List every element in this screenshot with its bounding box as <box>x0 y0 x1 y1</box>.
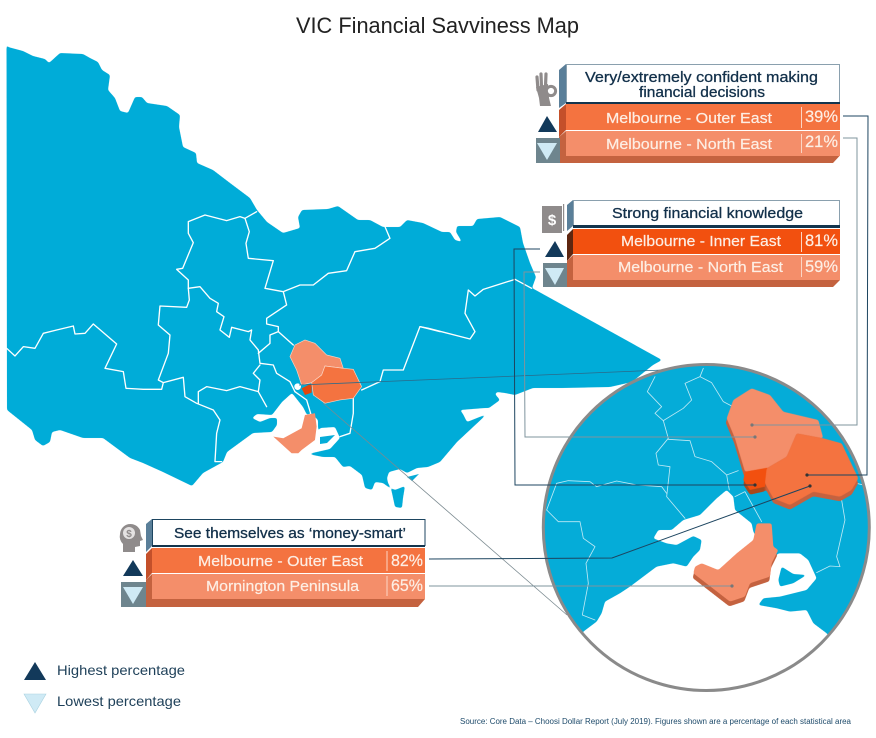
row labels: 81% <box>805 231 838 250</box>
island <box>320 435 335 444</box>
Melbourne dot <box>294 383 301 390</box>
region: Melbourne North East <box>290 340 343 385</box>
header text: financial decisions <box>639 84 765 101</box>
header bevel <box>146 519 152 552</box>
region boundaries <box>7 212 440 462</box>
legend: highest: Highest percentage <box>57 662 185 678</box>
header bevel <box>567 200 573 231</box>
region: Mornington Peninsula <box>273 413 317 453</box>
header text: Strong financial knowledge <box>612 205 803 222</box>
row dividers <box>800 107 802 153</box>
icon: dollar note <box>542 204 564 233</box>
highlighted regions on map <box>273 340 362 453</box>
borders in circle <box>547 368 863 620</box>
icon: dollar note: $ <box>548 212 557 229</box>
header box <box>574 200 840 226</box>
row: highest <box>152 548 425 573</box>
zoom region: Melbourne Outer East <box>765 433 858 505</box>
panel: money-smart <box>120 519 425 607</box>
row labels: 82% <box>391 551 423 570</box>
zoom region: Melbourne Inner East <box>743 468 767 490</box>
icon: head with dollar: $ <box>126 529 132 540</box>
icon: up triangle <box>545 241 564 257</box>
row labels: Melbourne - Inner East <box>621 233 782 250</box>
title: VIC Financial Savviness Map <box>296 13 579 38</box>
row: highest <box>566 104 840 130</box>
row: lowest <box>152 574 425 599</box>
region: Melbourne Inner East <box>302 383 312 395</box>
header text <box>585 69 818 101</box>
icon: head with dollar <box>120 524 143 552</box>
header text: Very/extremely confident making <box>585 69 818 86</box>
zoom circle of Melbourne <box>542 363 871 692</box>
connector lines to zoom circle <box>299 370 663 615</box>
small inlet land <box>407 474 419 481</box>
row labels: 39% <box>805 107 838 126</box>
icon: down triangle <box>543 263 567 287</box>
row labels <box>618 231 838 276</box>
header underline <box>152 545 425 547</box>
row dividers <box>800 232 802 277</box>
header bevel <box>559 64 566 108</box>
region: Melbourne Outer East <box>312 366 362 403</box>
header box <box>152 520 425 546</box>
row labels: Melbourne - North East <box>618 259 784 276</box>
zoom region: Mornington Peninsula <box>693 523 778 602</box>
row labels: 65% <box>391 576 423 595</box>
header underline <box>566 102 840 104</box>
row labels: Melbourne - North East <box>606 136 773 153</box>
row bevels <box>146 548 152 580</box>
legend <box>24 662 185 713</box>
header box <box>566 64 840 102</box>
icon: up triangle <box>538 116 557 132</box>
row labels <box>606 107 838 153</box>
island in circle <box>778 568 805 586</box>
legend: lowest: Lowest percentage <box>57 693 181 709</box>
map of Victoria <box>6 43 662 508</box>
legend: lowest <box>24 693 181 713</box>
header text: See themselves as ‘money-smart’ <box>174 525 406 542</box>
row labels: 21% <box>805 132 838 151</box>
row labels: Mornington Peninsula <box>206 578 360 595</box>
row dividers <box>386 551 388 596</box>
icon: down triangle <box>536 138 560 163</box>
row labels: Melbourne - Outer East <box>606 110 773 127</box>
row: highest <box>573 229 840 254</box>
icon: up triangle <box>123 560 143 576</box>
row: lowest <box>566 131 840 156</box>
3D region shadows <box>693 418 858 606</box>
row labels: 59% <box>805 257 838 276</box>
header underline <box>573 225 840 228</box>
row labels <box>198 551 423 595</box>
panel: confident making decisions <box>536 64 840 163</box>
icon: ok hand <box>536 74 556 106</box>
state outline <box>6 43 662 508</box>
row bevels <box>559 104 566 137</box>
circle ring <box>543 364 869 690</box>
bay and sea <box>583 490 828 689</box>
icon: down triangle <box>121 582 146 607</box>
zoom region: Melbourne North East <box>727 388 823 472</box>
panel: strong financial knowledge <box>542 200 840 287</box>
leader lines <box>429 116 868 588</box>
legend: highest <box>24 662 185 680</box>
row: lowest <box>573 255 840 280</box>
row bevels <box>567 229 573 261</box>
source note: Source: Core Data – Choosi Dollar Report (July 2019). Figures shown are a percentage of each statistical area <box>460 717 852 726</box>
row labels: Melbourne - Outer East <box>198 553 364 570</box>
